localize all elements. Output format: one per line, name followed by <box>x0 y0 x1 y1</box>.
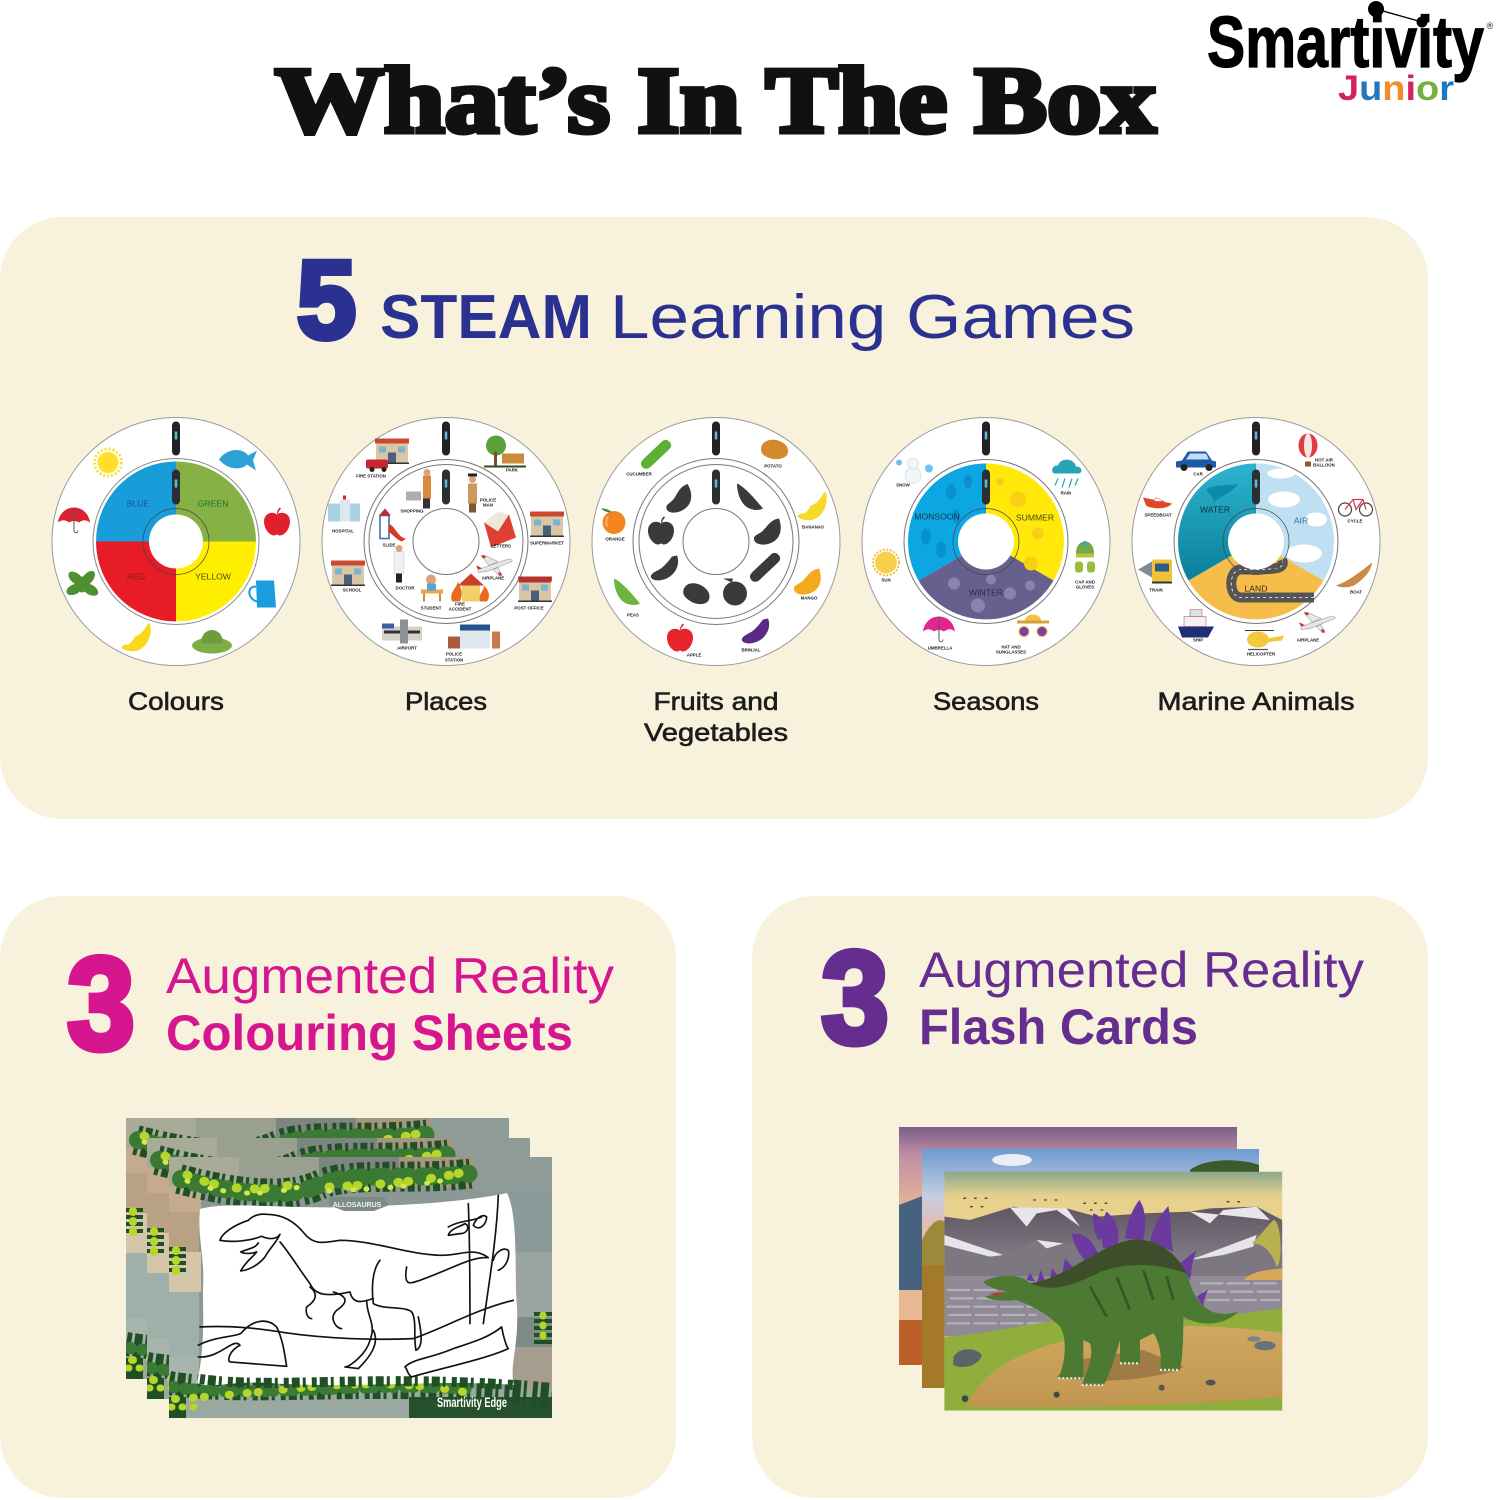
wheel: Marine Animals: WATER <box>1200 504 1230 514</box>
icon: fire accident <box>449 574 489 612</box>
panel: 5 STEAM Learning Games <box>0 217 1428 819</box>
icon: sun: SUN <box>881 578 891 582</box>
icon: hot air balloon: HOT AIR <box>1315 458 1334 462</box>
icon: ship: SHIP <box>1193 638 1203 642</box>
heading line 2: Flash Cards <box>919 999 1198 1055</box>
icon: peas <box>614 578 640 618</box>
icon: letters: LETTERS <box>491 544 511 548</box>
icon: fire accident: ACCIDENT <box>449 606 472 612</box>
heading: Learning Games light: Learning Games <box>610 283 1135 352</box>
number 3: 3 <box>821 924 889 1071</box>
icon: hospital <box>328 496 360 534</box>
icon: train: TRAIN <box>1149 588 1163 592</box>
heading line 1: Augmented Reality <box>919 942 1364 998</box>
icon: airplane <box>476 556 512 580</box>
flash card stack <box>899 1127 1282 1411</box>
icon: airport <box>382 620 422 650</box>
panel: Augmented Reality Flash Cards <box>752 896 1428 1498</box>
panel: Augmented Reality Colouring Sheets <box>0 896 676 1498</box>
back card <box>899 1127 1237 1365</box>
icon: student: STUDENT <box>421 606 442 610</box>
icon: fire station <box>356 438 409 478</box>
icon: school <box>331 560 365 592</box>
icon: snowman: SNOW <box>896 482 911 488</box>
wheel: Seasons <box>862 418 1110 666</box>
icon: helicopter <box>1245 630 1284 656</box>
icon: apple <box>667 624 701 658</box>
wheel: Seasons: WINTER <box>969 588 1003 598</box>
icon: cucumber: CUCUMBER <box>626 472 653 476</box>
icon: airplane <box>1297 612 1335 642</box>
wheel: Fruits and Vegetables <box>592 418 840 666</box>
middle card <box>922 1149 1259 1388</box>
icon: shopping: SHOPPING <box>400 508 424 514</box>
icon: hospital: HOSPITAL <box>332 528 354 534</box>
icon: apple <box>264 508 290 536</box>
wheel: Colours: GREEN <box>198 498 228 508</box>
icon: ship <box>1178 610 1214 642</box>
label: Places: Places <box>405 688 487 716</box>
icon: sun <box>94 449 122 476</box>
icon: fire accident: FIRE <box>455 602 465 606</box>
icon: cap and gloves <box>1075 541 1095 590</box>
icon: speedboat: SPEEDBOAT <box>1144 512 1172 518</box>
wheel: Marine Animals <box>1132 418 1380 666</box>
icon: brinjal <box>741 618 769 652</box>
icon: orange <box>601 508 626 542</box>
icon: leaves <box>65 568 100 598</box>
icon: slide <box>379 508 406 548</box>
icon: potato: POTATO <box>764 464 782 468</box>
icon: post office: POST OFFICE <box>514 606 544 610</box>
silhouettes <box>648 484 781 607</box>
icon: snowman <box>896 458 933 488</box>
icon: speedboat <box>1143 498 1172 518</box>
icon: police man: POLICE <box>480 498 496 502</box>
icon: umbrella <box>58 508 90 533</box>
icon: police station <box>445 624 500 662</box>
icon: car: CAR <box>1193 472 1204 476</box>
label: Fruits and Vegetables: Vegetables <box>644 719 788 747</box>
foliage over white edge <box>200 1379 514 1385</box>
icon: student <box>421 574 443 610</box>
wheel: Marine Animals: LAND <box>1245 584 1267 594</box>
icon: post office <box>514 576 552 610</box>
icon: cycle: CYCLE <box>1348 518 1363 524</box>
icon: umbrella: UMBRELLA <box>928 646 953 650</box>
icon: orange: ORANGE <box>605 536 625 542</box>
icon: umbrella <box>923 616 955 650</box>
number 3: 3 <box>67 930 135 1077</box>
icon: hot air balloon: BALLOON <box>1313 462 1335 468</box>
icon: bananas: BANANAS <box>802 524 824 530</box>
icon: airplane: AIRPLANE <box>482 576 504 580</box>
icon: police man: MAN <box>483 502 493 508</box>
icon: hat and sunglasses <box>996 614 1049 654</box>
wheel: Seasons: MONSOON <box>914 512 960 522</box>
logo: Smartivity Junior: ® <box>1487 21 1494 31</box>
brand mark: Smartivity Edge <box>437 1394 507 1410</box>
icon: boat <box>1336 562 1372 594</box>
icon: doctor: DOCTOR <box>396 586 415 590</box>
front card: stegosaurus painting <box>944 1172 1282 1411</box>
heading line 2: Colouring Sheets <box>166 1005 573 1061</box>
icon: cap and gloves: GLOVES <box>1076 584 1094 590</box>
label plate: ALLOSAURUS: ALLOSAURUS <box>333 1202 382 1209</box>
icon: airport: AIRPORT <box>397 646 417 650</box>
dinosaur line drawing <box>198 1195 513 1377</box>
icon: cycle <box>1338 500 1372 524</box>
colouring sheet stack <box>126 1118 552 1418</box>
icon: water jug <box>249 580 276 608</box>
icon: police station: STATION <box>445 658 463 662</box>
heading: STEAM Learning Games: STEAM <box>380 283 592 352</box>
icon: airplane: AIRPLANE <box>1297 638 1319 642</box>
wheel: Colours: BLUE <box>127 498 149 508</box>
title: What’s In The Box <box>275 49 1156 153</box>
icon: bananas <box>797 492 827 530</box>
icon: boat: BOAT <box>1350 590 1362 594</box>
icon: rain: RAIN <box>1061 490 1071 496</box>
icon: rain <box>1052 460 1082 496</box>
icon: doctor <box>394 545 415 590</box>
icon: fish <box>219 450 257 470</box>
icon: car <box>1176 452 1216 476</box>
icon: mango <box>794 568 821 600</box>
icon: helicopter: HELICOPTER <box>1247 652 1276 656</box>
icon: peas: PEAS <box>627 612 639 618</box>
icon: park: PARK <box>506 468 519 472</box>
heading line 1: Augmented Reality <box>166 948 614 1004</box>
icon: hat and sunglasses: HAT AND <box>1001 644 1021 650</box>
icon: bananas <box>121 624 151 651</box>
heading number 5: 5 <box>297 239 356 362</box>
icon: school: SCHOOL <box>343 588 362 592</box>
icon: slide: SLIDE <box>383 542 396 548</box>
label: Marine Animals: Marine Animals <box>1158 688 1354 716</box>
wheel: Seasons: SUMMER <box>1016 512 1054 522</box>
wheel: Marine Animals: AIR <box>1294 516 1308 526</box>
icon: brinjal: BRINJAL <box>741 648 761 652</box>
icon: mango: MANGO <box>801 596 818 600</box>
icon: apple: APPLE <box>687 652 701 658</box>
icon: train <box>1138 560 1172 592</box>
front colouring sheet <box>169 1157 552 1418</box>
icon: police man <box>468 474 496 512</box>
icon: sun <box>873 550 899 582</box>
icon: green hat <box>192 630 232 654</box>
label: Seasons: Seasons <box>933 688 1039 716</box>
icon: letters <box>484 512 516 548</box>
label: Fruits and Vegetables <box>644 688 788 747</box>
wheel: Places <box>322 418 570 666</box>
wheel: Colours: RED <box>127 572 145 582</box>
icon: fire station: FIRE STATION <box>356 474 386 478</box>
icon: police station: POLICE <box>446 652 462 656</box>
icon: hat and sunglasses: SUNGLASSES <box>996 650 1026 654</box>
wheel: Colours <box>52 418 300 666</box>
label: Colours: Colours <box>128 688 224 716</box>
icon: cucumber <box>626 440 671 476</box>
icon: cap and gloves: CAP AND <box>1075 580 1095 584</box>
icon: supermarket: SUPERMARKET <box>530 540 564 546</box>
icon: shopping <box>400 469 431 514</box>
icon: supermarket <box>530 512 564 546</box>
label plate: ALLOSAURUS <box>329 1197 389 1211</box>
icon: hot air balloon <box>1298 434 1335 468</box>
wheel: Colours: YELLOW <box>195 572 232 582</box>
label: Fruits and Vegetables: Fruits and <box>654 688 778 716</box>
icon: park <box>484 436 526 472</box>
logo: Smartivity Junior: Junior <box>1338 69 1454 108</box>
icon: potato <box>761 440 788 468</box>
